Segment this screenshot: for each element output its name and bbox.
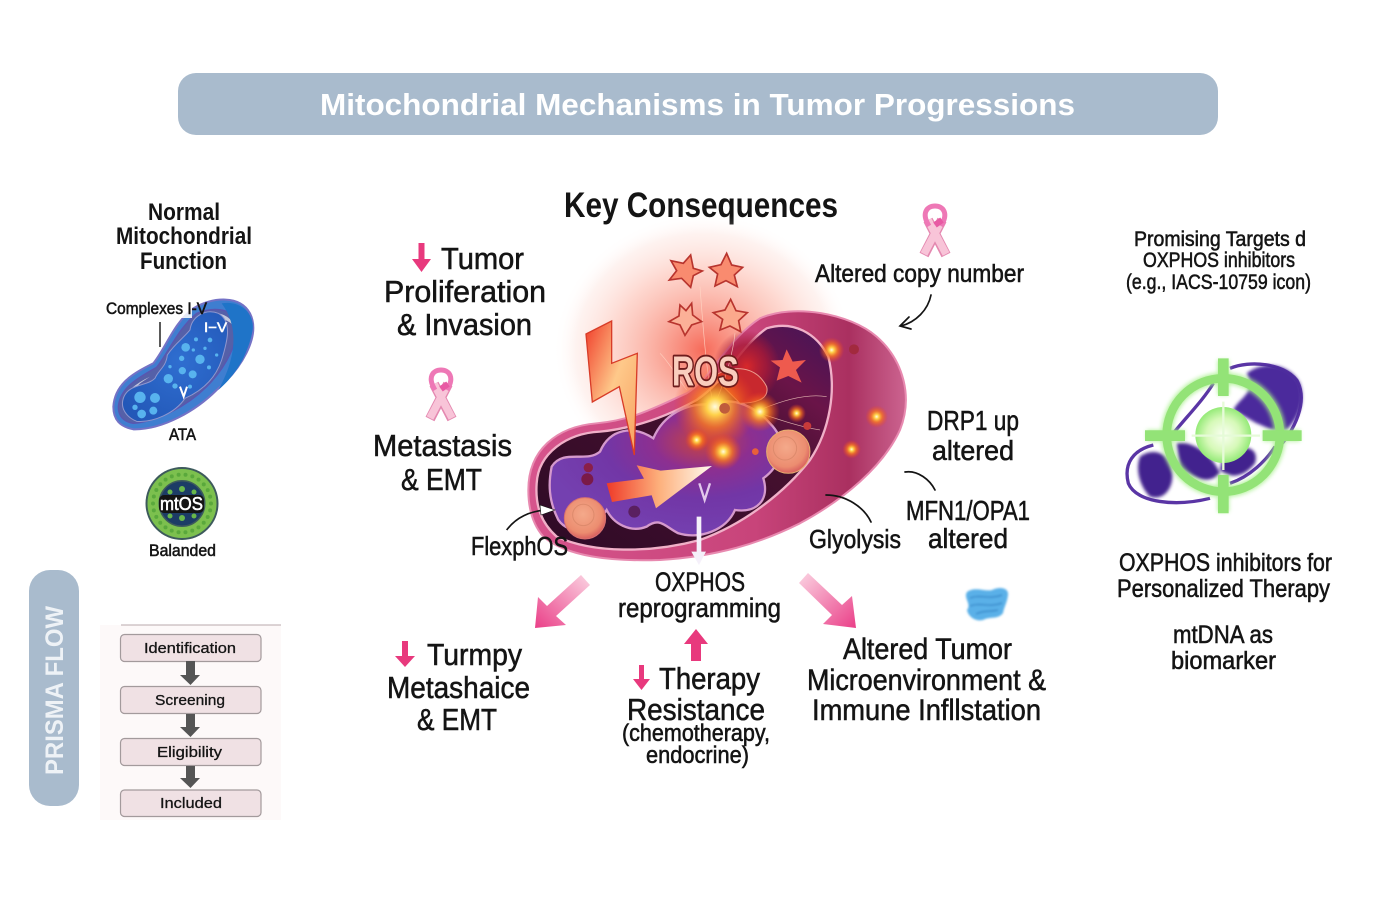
label: OXPHOS reprogramming: [618, 567, 781, 623]
text block: therapy resistance: endocrine): [646, 742, 749, 769]
pale upper fold: [713, 369, 767, 403]
label: MFN1/OPA1 altered: altered: [928, 523, 1008, 554]
inner folds: [550, 402, 781, 535]
icon: down arrow: [633, 665, 650, 690]
spheres: [564, 430, 810, 539]
label: ATA: ATA: [169, 425, 197, 444]
heading: normal mitochondrial function: Function: [140, 248, 227, 275]
label: MFN1/OPA1 altered: MFN1/OPA1: [906, 495, 1030, 526]
sparks and burst: [581, 337, 888, 518]
text block: tumor proliferation: Tumor: [441, 241, 524, 276]
outer membrane: [528, 311, 906, 560]
label: DRP1 up altered: altered: [932, 435, 1014, 466]
text block: mtDNA biomarker: [1171, 621, 1276, 675]
label: OXPHOS reprogramming: OXPHOS: [655, 567, 745, 597]
panel: normal mitochondrial function: [104, 199, 253, 560]
icon: pink ribbon right: [924, 206, 946, 255]
arrow: pink down-right: [799, 573, 856, 628]
step: eligibility: Eligibility: [157, 744, 223, 761]
text block: altered tumor microenvironment: Immune Infllstation: [812, 694, 1041, 727]
icon: pink ribbon left: [430, 370, 452, 419]
bolt arrow: [607, 465, 712, 508]
text block: altered tumor microenvironment: [807, 633, 1046, 727]
text block: turmpy metashaice: & EMT: [417, 702, 497, 737]
label: DRP1 up altered: DRP1 up: [927, 405, 1019, 436]
text block: promising targets: [1126, 228, 1311, 294]
star inside: [771, 349, 806, 383]
heading: normal mitochondrial function: Mitochondrial: [116, 223, 252, 250]
red patch in cavity: [713, 330, 780, 403]
lightning bolt: [586, 321, 637, 455]
text block: turmpy metashaice: Metashaice: [387, 670, 530, 705]
heading: normal mitochondrial function: Normal: [148, 199, 220, 226]
icon: blue cells: [966, 588, 1008, 620]
step: identification: Identification: [144, 640, 236, 657]
illustration: damaged mitochondrion with ROS: [507, 213, 906, 565]
step: included: [120, 790, 261, 816]
text block: metastasis and EMT: & EMT: [401, 462, 482, 497]
text block: OXPHOS inhibitors for personalized therapy: [1117, 549, 1332, 603]
spark filaments: [660, 287, 827, 430]
step: identification: [120, 634, 261, 662]
label: altered copy number: Altered copy number: [815, 260, 1024, 288]
label: flexphos: FlexphOS: [471, 531, 568, 561]
arrow: flexphos pointer: [507, 510, 545, 530]
target glow: [1147, 360, 1300, 512]
text block: tumor proliferation: Proliferation: [384, 274, 546, 309]
text block: therapy resistance: [622, 661, 770, 769]
text block: therapy resistance: Resistance: [627, 692, 765, 727]
title banner: Mitochondrial Mechanisms in Tumor Progressions: [320, 87, 1075, 122]
icon: mtDNA circle: mtOS: [160, 494, 203, 514]
text block: altered tumor microenvironment: Microenvironment &: [807, 664, 1046, 697]
label: complexes I-V: Complexes I-V: [106, 299, 208, 318]
icon: blue mitochondrion: [113, 300, 253, 429]
connector: glycolysis curve: [826, 495, 871, 522]
text block: therapy resistance: (chemotherapy,: [622, 720, 770, 747]
side label: PRISMA flow: [29, 570, 79, 806]
side label: PRISMA flow: PRISMA FLOW: [41, 606, 69, 775]
step: screening: Screening: [155, 692, 225, 709]
title banner: [178, 73, 1218, 135]
text block: turmpy metashaice: Turmpy: [427, 637, 522, 672]
purple mitochondrion: [1127, 364, 1301, 503]
step: included: Included: [160, 795, 222, 812]
icon: down arrow: [395, 641, 415, 667]
text block: altered tumor microenvironment: Altered Tumor: [843, 633, 1012, 666]
step: screening: [120, 686, 261, 714]
icon: mtDNA circle: [146, 467, 218, 540]
arrow: identification to screening: [180, 661, 200, 685]
text block: promising targets: (e.g., IACS-10759 icon): [1126, 271, 1311, 294]
arrow head: flexphos pointer: [540, 505, 555, 515]
text block: mtDNA biomarker: mtDNA as: [1173, 621, 1273, 649]
heading: normal mitochondrial function: [116, 199, 252, 275]
text block: OXPHOS inhibitors for personalized therapy: OXPHOS inhibitors for: [1119, 549, 1332, 577]
icon: green target over mitochondrion: [1127, 358, 1302, 513]
target core: [1195, 407, 1251, 463]
text block: OXPHOS inhibitors for personalized therapy: Personalized Therapy: [1117, 575, 1330, 603]
text block: metastasis and EMT: Metastasis: [373, 428, 512, 463]
label: complexes I-V: [104, 298, 228, 347]
text block: therapy resistance: Therapy: [659, 661, 760, 696]
text block: tumor proliferation: [384, 241, 546, 342]
ROS stars: [669, 253, 747, 335]
text block: turmpy metashaice: [387, 637, 530, 737]
red glow: [553, 213, 853, 487]
label: complexes I-V: I−V: [204, 319, 228, 335]
label: DRP1 up altered: [927, 405, 1019, 466]
arrow: copy number pointer: [900, 295, 931, 329]
arrow: pink up: [684, 629, 708, 661]
arrow: eligibility to included: [180, 766, 200, 788]
text block: promising targets: Promising Targets d: [1134, 228, 1306, 251]
label: V: [699, 483, 710, 500]
arrow: pink down-left: [535, 575, 590, 628]
heading: key consequences: Key Consequences: [564, 186, 838, 225]
text block: mtDNA biomarker: biomarker: [1171, 647, 1276, 675]
text block: tumor proliferation: & Invasion: [397, 307, 532, 342]
label: OXPHOS reprogramming: reprogramming: [618, 593, 781, 623]
inner cavity: [536, 326, 832, 550]
icon: down arrow: [412, 243, 431, 272]
target ring and crosshair: [1145, 358, 1302, 513]
label: balanced: Balanded: [149, 541, 216, 560]
connector: DRP1 curve: [905, 472, 935, 490]
ROS label: ROS: [672, 349, 739, 395]
panel: PRISMA flow chart: [100, 625, 281, 820]
text block: promising targets: OXPHOS inhibitors: [1143, 249, 1295, 272]
purple matrix blobs: [1138, 365, 1302, 497]
step: eligibility: [120, 738, 261, 766]
arrow: screening to eligibility: [180, 714, 200, 737]
label: glyolysis: Glyolysis: [809, 524, 901, 554]
white down arrow: [691, 517, 706, 565]
text block: metastasis and EMT: [373, 428, 512, 497]
label: MFN1/OPA1 altered: [906, 495, 1030, 554]
